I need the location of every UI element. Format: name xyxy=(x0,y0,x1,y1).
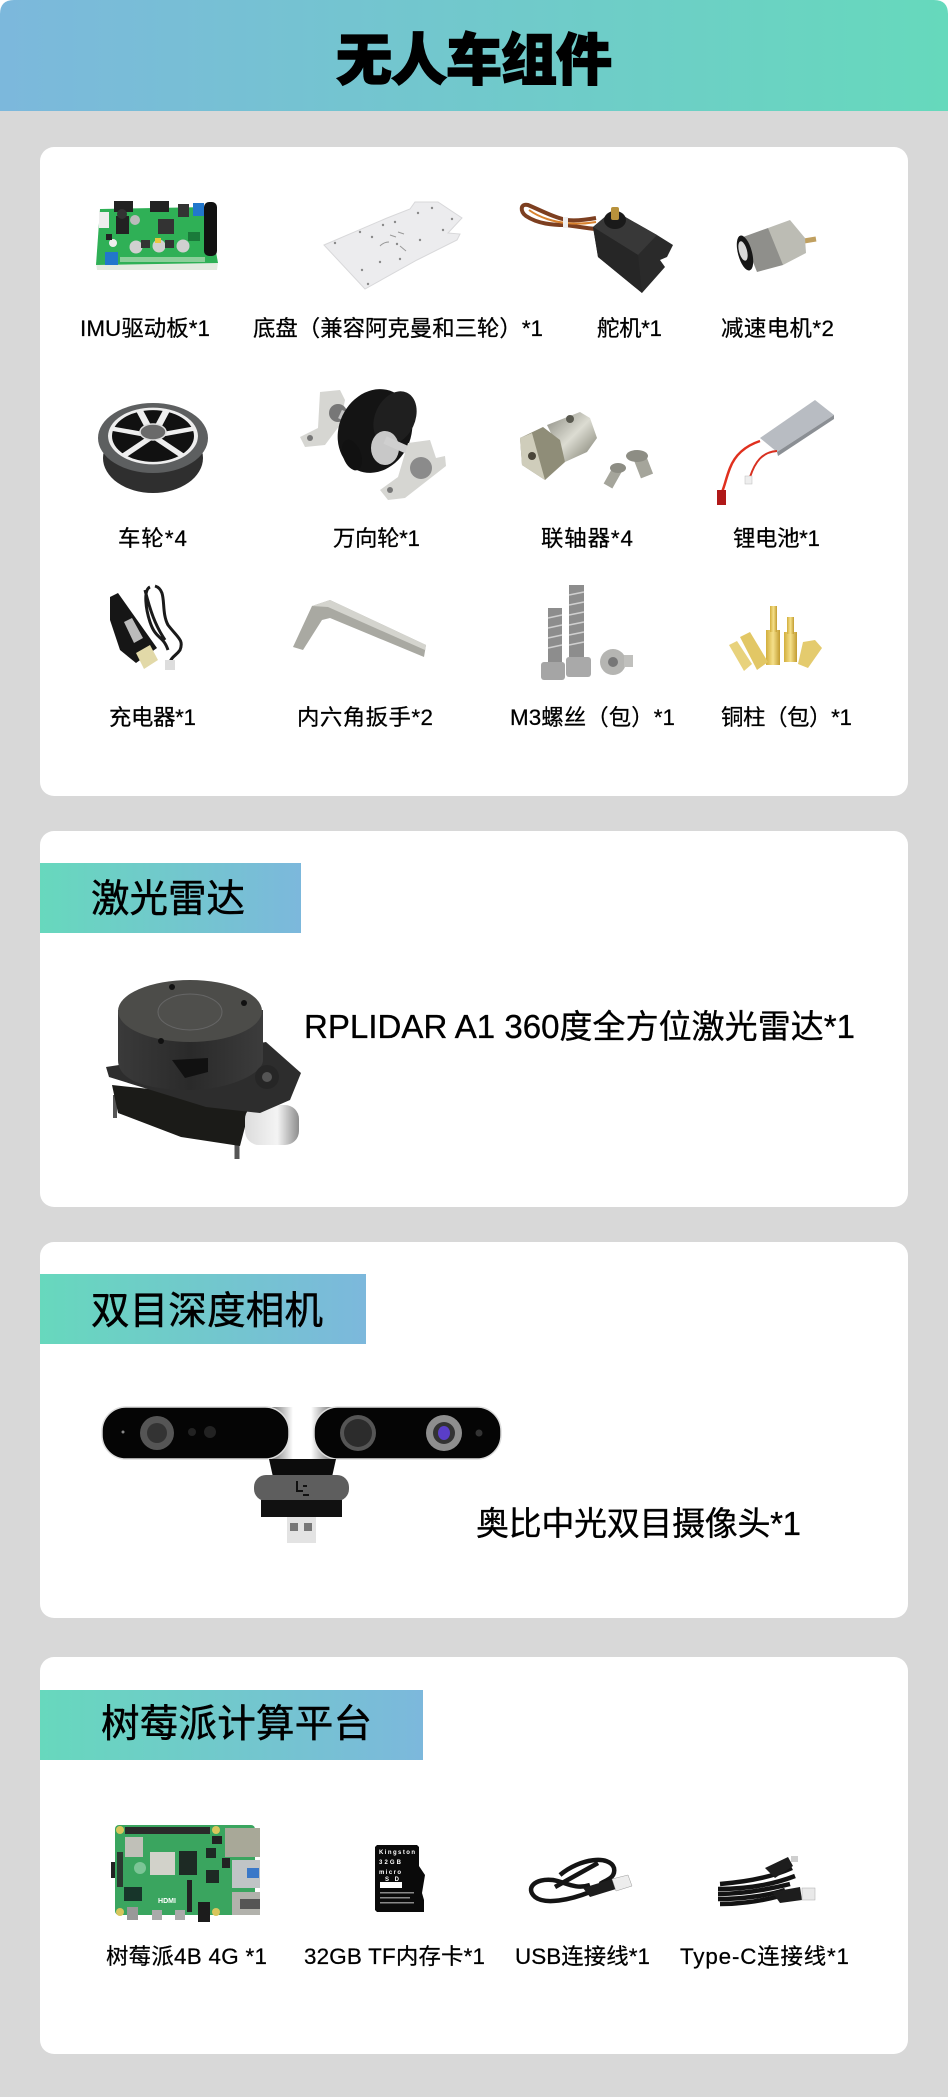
label: charger: 充电器*1 xyxy=(109,705,196,730)
label: servo: 舵机*1 xyxy=(597,316,662,341)
label: wheel: 车轮*4 xyxy=(118,526,187,551)
heading tag: stereo camera xyxy=(40,1274,366,1344)
icon: TF card: SD xyxy=(385,1877,400,1883)
panel: raspberry pi platform xyxy=(40,1657,908,2054)
text: camera name: 奥比中光双目摄像头*1 xyxy=(476,1505,801,1542)
panel: stereo camera xyxy=(40,1242,908,1618)
icon: servo xyxy=(522,205,673,293)
icon: coupler with screws xyxy=(520,412,648,486)
icon: M3 screws xyxy=(541,585,633,680)
icon: lithium battery xyxy=(717,400,834,505)
header banner xyxy=(0,0,948,111)
label: coupler: 联轴器*4 xyxy=(541,526,633,551)
icon: omni caster xyxy=(300,377,446,500)
label: standoffs: 铜柱（包）*1 xyxy=(721,705,852,730)
icon: USB cable xyxy=(531,1860,632,1901)
icon: brass standoffs xyxy=(729,606,822,671)
label: IMU board: IMU驱动板*1 xyxy=(80,316,210,341)
heading tag: stereo camera: 双目深度相机 xyxy=(91,1290,323,1333)
icon: TF card: 32GB xyxy=(379,1860,402,1866)
icon: depth camera xyxy=(102,1407,501,1543)
label: geared motor: 减速电机*2 xyxy=(721,316,834,341)
label: TF card: 32GB TF内存卡*1 xyxy=(304,1944,485,1969)
label: M3 screws: M3螺丝（包）*1 xyxy=(510,705,675,730)
icon: TF card: micro xyxy=(379,1870,401,1876)
label: battery: 锂电池*1 xyxy=(733,526,820,551)
icon: charger xyxy=(110,586,181,670)
label: caster: 万向轮*1 xyxy=(333,526,420,551)
label: Raspberry Pi: 树莓派4B 4G *1 xyxy=(106,1944,267,1969)
heading tag: raspberry pi: 树莓派计算平台 xyxy=(101,1703,372,1746)
panel: lidar xyxy=(40,831,908,1207)
icon: TF card xyxy=(375,1845,425,1912)
heading tag: lidar xyxy=(40,863,301,933)
panel: vehicle components xyxy=(40,147,908,796)
text: lidar name: RPLIDAR A1 360度全方位激光雷达*1 xyxy=(304,1008,855,1045)
icon: geared motor xyxy=(734,220,816,272)
label: Type-C cable: Type-C连接线*1 xyxy=(680,1944,849,1969)
icon: Type-C cable xyxy=(718,1856,815,1904)
label: USB cable: USB连接线*1 xyxy=(515,1944,650,1969)
heading tag: lidar: 激光雷达 xyxy=(91,878,245,921)
label: chassis: 底盘（兼容阿克曼和三轮）*1 xyxy=(253,316,543,341)
heading tag: raspberry pi xyxy=(40,1690,423,1760)
icon: wheel xyxy=(98,403,208,493)
icon: hex key xyxy=(293,600,426,657)
icon: TF card: Kingston xyxy=(379,1850,415,1856)
label: hex key: 内六角扳手*2 xyxy=(297,705,433,730)
icon: IMU driver board xyxy=(96,201,218,270)
icon: chassis plate xyxy=(324,202,462,289)
icon: Raspberry Pi 4B xyxy=(111,1825,260,1922)
icon: Raspberry Pi 4B: HDMI xyxy=(158,1898,176,1905)
icon: RPLIDAR xyxy=(106,980,301,1159)
title: 无人车组件 xyxy=(336,29,612,92)
